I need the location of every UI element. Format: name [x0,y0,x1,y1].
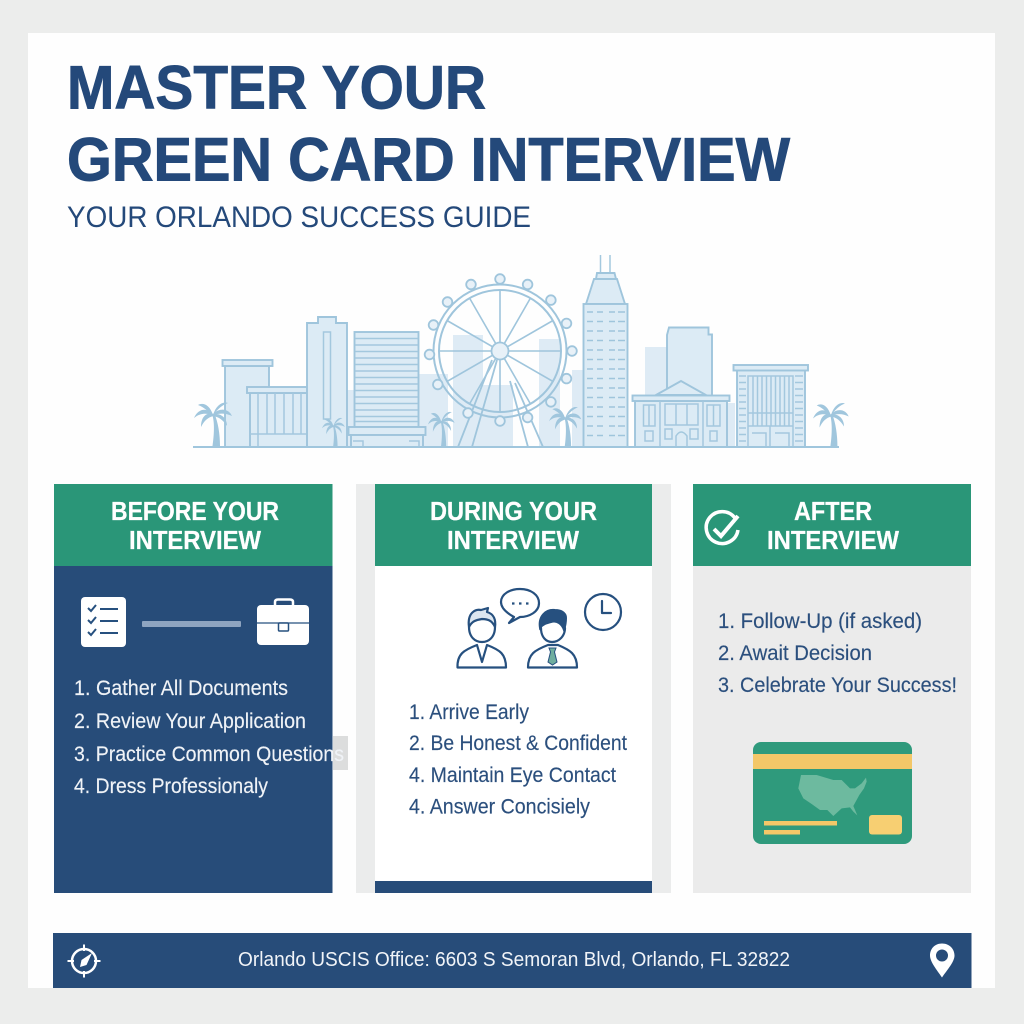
icon: two people talking with clock [457,589,621,668]
panel: during your interview [356,484,671,893]
building: capitol [632,381,730,447]
list: during steps [409,700,627,818]
panel body [693,566,971,893]
icon: green card [753,742,912,844]
list: during steps: 4. Answer Concisiely [409,794,590,818]
heading: AFTER [794,498,872,526]
panel header [54,484,332,566]
list: before steps [74,676,344,798]
list: after steps: 1. Follow-Up (if asked) [718,609,922,633]
address text: Orlando USCIS Office: 6603 S Semoran Blvd, Orlando, FL 32822 [238,949,790,971]
heading: INTERVIEW [129,527,262,555]
building: rear block [667,328,712,397]
panel: before your interview [54,484,348,893]
connector bar [142,621,241,627]
speech bubble [501,589,539,623]
list: after steps: 2. Await Decision [718,641,872,665]
building: colonnade [247,387,321,447]
person right [528,610,577,668]
building: stepped tower [307,317,347,447]
subtitle: YOUR ORLANDO SUCCESS GUIDE [67,201,531,234]
palm trees [194,402,849,447]
list: after steps: 3. Celebrate Your Success! [718,673,957,697]
panel outer frame [356,484,671,893]
ground line [193,446,839,448]
ferris wheel [425,274,577,447]
list: during steps: 1. Arrive Early [409,700,529,724]
icon: check badge [706,512,738,544]
list: before steps: 4. Dress Professionaly [74,774,268,798]
footer address bar [53,933,972,988]
person left [457,608,506,668]
building: spire tower [584,255,628,447]
list: before steps: 1. Gather All Documents [74,676,288,700]
heading [767,498,900,555]
list: before steps: 2. Review Your Application [74,709,306,733]
title [67,54,790,194]
heading: DURING YOUR [430,498,597,526]
panel header [375,484,652,566]
footer band [375,881,652,893]
pale background buildings [347,335,735,447]
heading: BEFORE YOUR [111,498,279,526]
illustration: Orlando skyline [193,255,849,448]
title: MASTER YOUR [67,54,486,122]
icon: briefcase [257,600,309,645]
panel: after interview [693,484,971,893]
panel body [375,566,652,893]
icon: map pin [930,944,954,978]
heading: INTERVIEW [767,527,900,555]
icon: compass [68,944,100,978]
building: striped hotel [348,332,426,447]
clock [585,594,621,630]
list: during steps: 4. Maintain Eye Contact [409,763,616,787]
icon: checklist [81,597,126,647]
tag behind list text [333,736,348,770]
panel body [54,566,332,893]
list: after steps [718,609,957,697]
building: right block [734,365,808,447]
title: GREEN CARD INTERVIEW [67,126,790,194]
panel header [693,484,971,566]
building: left block [222,360,272,447]
heading [430,498,597,555]
list: before steps: 3. Practice Common Questions [74,742,344,766]
heading [111,498,279,555]
heading: INTERVIEW [447,527,580,555]
list: during steps: 2. Be Honest & Confident [409,731,627,755]
